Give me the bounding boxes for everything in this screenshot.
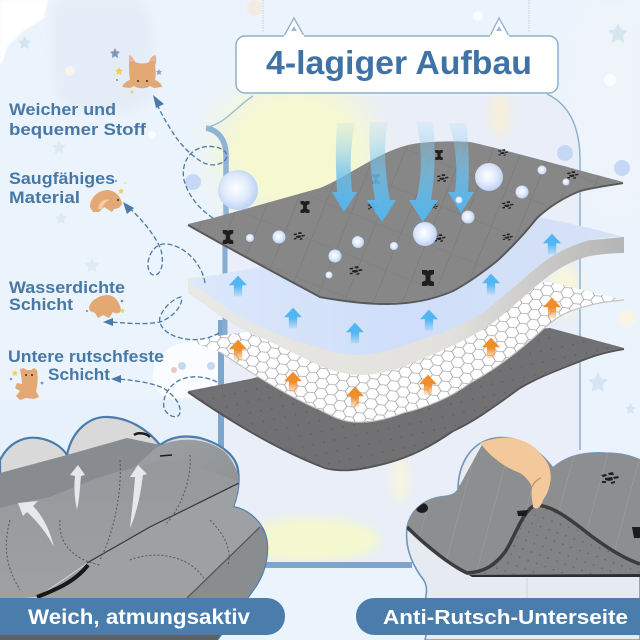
label: waterproof layer: Schicht (9, 295, 73, 314)
icon: hamster lying flat (110, 48, 162, 94)
upward orange arrows (229, 298, 561, 407)
label: non-slip layer (8, 347, 164, 384)
caption: anti-slip underside (356, 598, 640, 635)
icon: curled hamster (90, 180, 126, 212)
downward water arrows (332, 122, 474, 222)
title text: 4-lagiger Aufbau (266, 44, 532, 81)
dashed arrow: absorbent material (123, 202, 205, 283)
caption: anti-slip underside: Anti-Rutsch-Unterseite (383, 607, 628, 629)
jar background shape (206, 80, 581, 567)
label: absorbent material: Saugfähiges (9, 169, 115, 188)
cloud decoration behind layers (153, 342, 218, 398)
dashed arrow: soft fabric (153, 95, 227, 218)
white air arrows (18, 465, 147, 547)
label: soft fabric: Weicher und (9, 100, 116, 119)
photo panel: soft breathable fabric (0, 417, 270, 640)
label: waterproof layer: Wasserdichte (9, 278, 125, 297)
label: non-slip layer: Schicht (48, 365, 110, 384)
dashed arrow: waterproof layer (103, 297, 219, 340)
label: absorbent material: Material (9, 188, 80, 207)
label: soft fabric: bequemer Stoff (9, 120, 146, 139)
layer 3: hexagon absorbent core (188, 282, 624, 422)
icon: walking hamster (86, 295, 125, 318)
label: waterproof layer (9, 278, 125, 314)
bones and paw prints (223, 149, 579, 286)
label: non-slip layer: Untere rutschfeste (8, 347, 164, 366)
upward blue arrows (229, 234, 561, 343)
photo panel: non-slip underside (400, 430, 640, 640)
icon: standing hamster (10, 368, 43, 400)
caption: soft breathable: Weich, atmungsaktiv (28, 606, 250, 629)
dashed arrow: non-slip layer (111, 375, 217, 417)
water bubbles (185, 145, 630, 278)
layer 2: waterproof layer (188, 217, 624, 375)
label: soft fabric (9, 100, 146, 139)
layer 1: grey quilted top fabric (188, 141, 623, 304)
title banner (236, 18, 558, 93)
caption: soft breathable (0, 598, 285, 635)
label: absorbent material (9, 169, 115, 207)
layer 4: non-slip bottom (188, 328, 624, 470)
hand (480, 438, 551, 508)
